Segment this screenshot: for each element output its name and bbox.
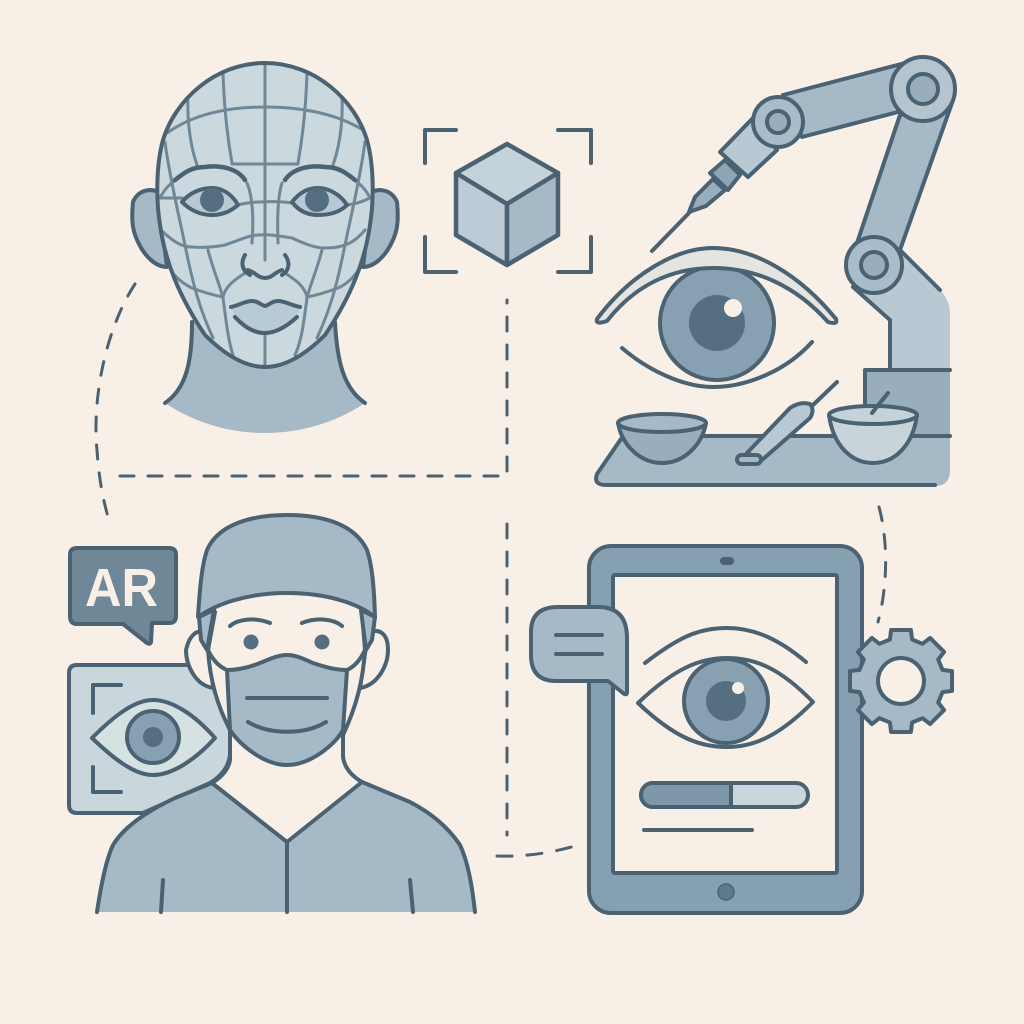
tablet eye <box>638 628 813 747</box>
scalpel <box>737 382 837 464</box>
tablet <box>589 546 862 913</box>
gear icon <box>850 630 952 732</box>
table <box>596 436 950 486</box>
speech bubble <box>531 607 627 694</box>
cap <box>198 515 375 617</box>
camera and home button <box>722 559 732 563</box>
infographic canvas <box>67 55 957 915</box>
right bowl <box>829 393 917 463</box>
ears <box>132 190 167 267</box>
eye <box>597 248 836 387</box>
face and neck <box>208 605 365 842</box>
eyes and brows <box>244 634 258 650</box>
AR label: AR <box>85 558 158 618</box>
AR speech box <box>70 548 176 644</box>
syringe <box>652 97 803 251</box>
cap straps <box>199 610 214 650</box>
nose <box>242 255 288 278</box>
joints <box>891 57 955 121</box>
caption line <box>644 828 752 832</box>
lower column <box>846 240 950 372</box>
dashed connectors <box>96 284 886 856</box>
3D cube with frame <box>425 130 591 272</box>
mesh lines <box>160 63 370 367</box>
body <box>97 782 475 912</box>
head shape <box>157 63 373 367</box>
mask <box>227 655 347 765</box>
right eye <box>292 188 347 215</box>
left bowl <box>618 414 706 463</box>
mouth <box>231 301 300 333</box>
upper arms <box>858 103 952 250</box>
brows <box>175 166 355 180</box>
face mesh head <box>132 63 398 433</box>
head outline <box>157 63 373 367</box>
robotic arm with eye <box>596 57 955 486</box>
progress bar <box>641 783 808 807</box>
surgeon <box>97 515 475 912</box>
AR eye panel <box>69 665 230 813</box>
neck <box>165 322 365 433</box>
base block <box>865 370 950 437</box>
ears <box>186 631 213 688</box>
left eye <box>182 188 238 215</box>
